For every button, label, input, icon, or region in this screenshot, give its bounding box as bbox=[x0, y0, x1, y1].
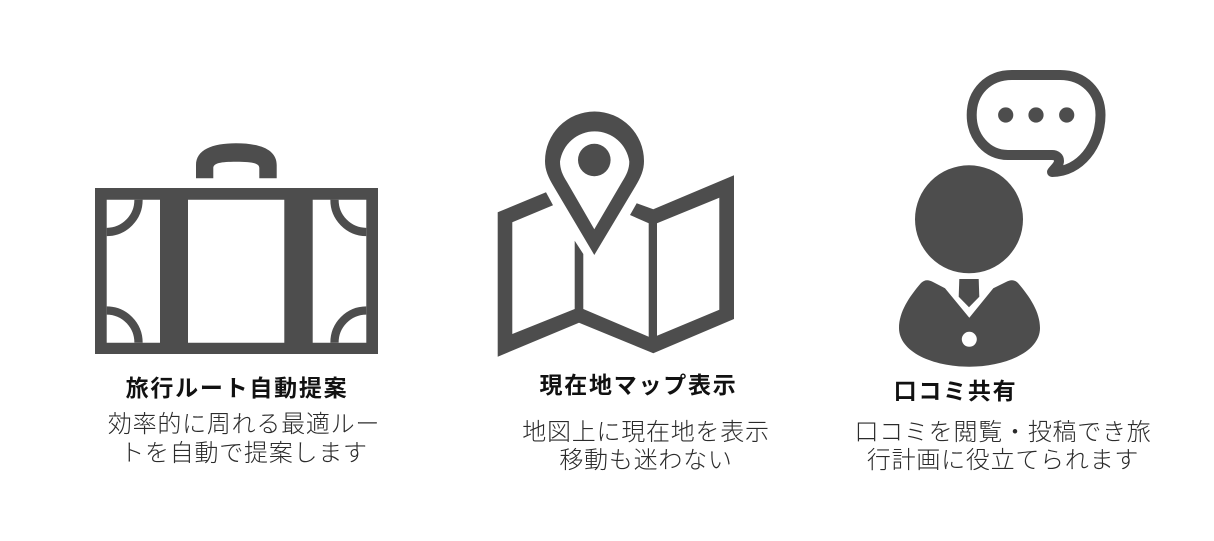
text: current location description bbox=[522, 418, 770, 474]
text: current location description: 地図上に現在地を表示 bbox=[522, 418, 770, 446]
person bbox=[899, 165, 1040, 367]
icon: suitcase bbox=[95, 143, 378, 354]
speech bubble bbox=[972, 75, 1100, 172]
icon: map with pin bbox=[498, 112, 734, 357]
text: route suggestion description: トを自動で提案します bbox=[120, 440, 368, 466]
heading: reviews: 口コミ共有 bbox=[894, 378, 1017, 404]
text: reviews description: 行計画に役立てられます bbox=[867, 446, 1139, 474]
panel: current location map bbox=[498, 112, 770, 474]
panel: route suggestion bbox=[95, 143, 380, 466]
icon: person with speech bubble bbox=[899, 70, 1106, 367]
text: route suggestion description bbox=[108, 410, 380, 466]
text: reviews description bbox=[854, 418, 1152, 474]
text: current location description: 移動も迷わない bbox=[559, 446, 733, 474]
text: route suggestion description: 効率的に周れる最適ルー bbox=[108, 410, 380, 438]
panel: reviews bbox=[854, 70, 1152, 474]
heading: route suggestion: 旅行ルート自動提案 bbox=[126, 375, 348, 401]
heading: current location map: 現在地マップ表示 bbox=[540, 372, 738, 398]
text: reviews description: 口コミを閲覧・投稿でき旅 bbox=[854, 418, 1152, 446]
